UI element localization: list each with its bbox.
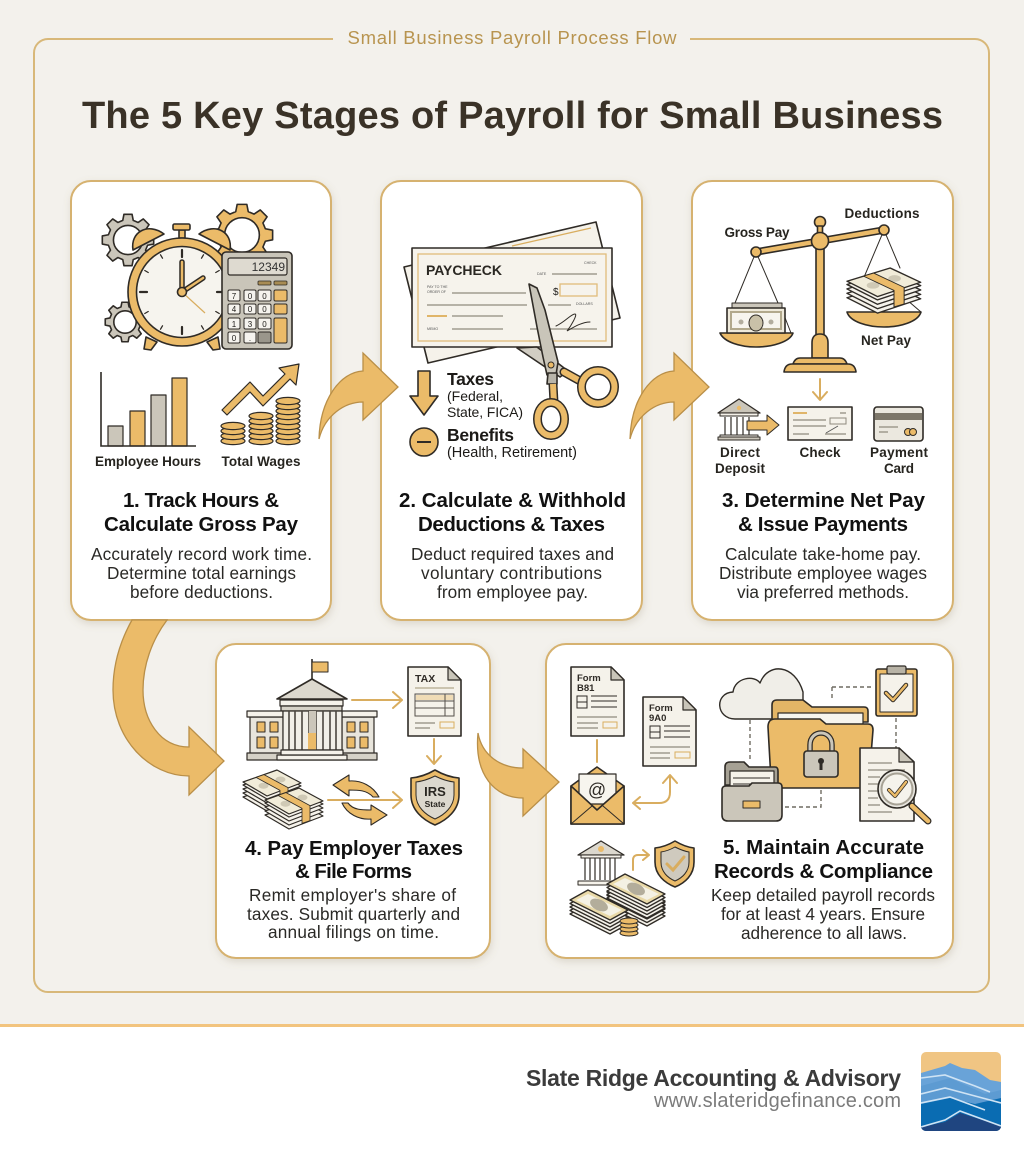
- panel: step 3: [692, 181, 953, 620]
- text: taxes: (Federal,: [447, 388, 503, 404]
- panel: step 5: [546, 644, 953, 958]
- text: step 1: [91, 544, 312, 602]
- text: step 2: from employee pay.: [437, 582, 588, 602]
- icon: small file folder: [722, 762, 782, 821]
- payment labels: Deposit: [715, 461, 766, 476]
- icon: paycheck: PAY TO THE: [427, 285, 448, 289]
- icon: clipboard: [876, 666, 917, 716]
- heading: step 3: [722, 489, 926, 536]
- connector: form to envelope: [596, 740, 598, 762]
- heading: step 3: & Issue Payments: [738, 513, 908, 536]
- icon: small bank: [578, 841, 624, 885]
- heading: step 2: [399, 489, 626, 536]
- icon: paycheck: PAYCHECK: [426, 262, 502, 278]
- chart labels: Total Wages: [222, 454, 300, 469]
- icon: minus circle: [410, 428, 438, 456]
- heading: step 1: [104, 489, 299, 536]
- heading: step 5: 5. Maintain Accurate: [723, 836, 924, 859]
- panel: step 2: [381, 181, 642, 620]
- icon: large folder with lock: [768, 700, 873, 788]
- icon: small coin stack: [620, 918, 638, 936]
- icon: form 941 document: B81: [577, 683, 595, 694]
- icon: cloud: [720, 669, 803, 719]
- text: step 1: Accurately record work time.: [91, 544, 312, 564]
- text: benefits: Benefits: [447, 425, 514, 445]
- text: step 4: annual filings on time.: [268, 922, 439, 942]
- text: step 4: taxes. Submit quarterly and: [247, 904, 460, 924]
- icon: paycheck: [404, 222, 620, 363]
- text: benefits: [447, 425, 577, 461]
- icon: payment card: [874, 407, 923, 441]
- text: taxes: Taxes: [447, 369, 494, 389]
- icon: tax form: [408, 667, 461, 736]
- text: step 4: [247, 885, 460, 942]
- icon: taxes arrow: [410, 371, 438, 415]
- heading: step 4: & File Forms: [295, 860, 412, 883]
- icon: calculator: 0: [262, 305, 267, 314]
- icon: calculator: 12349: [252, 260, 285, 274]
- text: step 5: [711, 885, 935, 943]
- icon: IRS shield: IRS: [424, 784, 446, 799]
- icon: form 940 document: Form: [649, 703, 673, 714]
- title: The 5 Key Stages of Payroll for Small Business: [82, 95, 943, 137]
- scale labels: Gross Pay: [724, 225, 790, 240]
- heading: step 1: 1. Track Hours &: [123, 489, 279, 512]
- icon: calculator: 3: [248, 320, 253, 329]
- icon: paycheck: MEMO: [427, 327, 438, 331]
- icon: email envelope: @: [588, 780, 606, 800]
- icon: calculator: 1: [232, 320, 237, 329]
- arrow: down to payments: [813, 379, 827, 400]
- icon: paycheck: DOLLARS: [576, 302, 593, 306]
- icon: cash stacks: [243, 770, 323, 829]
- heading: step 2: 2. Calculate & Withhold: [399, 489, 626, 512]
- text: step 2: Deduct required taxes and: [411, 544, 614, 564]
- icon: calculator: 0: [232, 334, 237, 343]
- heading: step 1: Calculate Gross Pay: [104, 513, 299, 536]
- icon: rising wage arrow: [222, 364, 299, 415]
- icon: alarm clock: [128, 224, 236, 350]
- icon: audit document with magnifier: [860, 748, 928, 821]
- icon: government building: [247, 659, 377, 760]
- heading: step 2: Deductions & Taxes: [418, 513, 605, 536]
- payment labels: Card: [884, 461, 914, 476]
- arrow: step 3 to step 4: [113, 620, 224, 795]
- icon: compliance shield: [655, 841, 694, 887]
- heading: step 3: 3. Determine Net Pay: [722, 489, 926, 512]
- icon: form 940 document: 9A0: [649, 713, 666, 724]
- footer band: [0, 1024, 1024, 1154]
- arrow: step 4 to step 5: [478, 733, 559, 816]
- panel: step 4: [216, 644, 490, 958]
- bar chart: employee hours: [101, 372, 196, 446]
- arrow: envelope to form: [633, 775, 677, 809]
- arrow: step 1 to step 2: [319, 353, 398, 439]
- icon: form 941 document: Form: [577, 673, 601, 684]
- icon: coin stacks: [221, 397, 300, 445]
- icon: calculator: 0: [248, 305, 253, 314]
- heading: step 5: [714, 836, 933, 883]
- icon: calculator: [222, 252, 292, 349]
- icon: calculator: .: [249, 334, 251, 343]
- icon: paycheck: CHECK: [584, 261, 597, 265]
- icon: paycheck: DATE: [537, 272, 547, 276]
- chart labels: Employee Hours: [95, 454, 201, 469]
- scale labels: Deductions: [844, 206, 920, 221]
- text: step 3: [719, 544, 927, 602]
- icon: calculator: 0: [248, 292, 253, 301]
- outer frame: [34, 39, 989, 992]
- payment labels: Check: [800, 445, 841, 460]
- logo: [921, 1052, 1001, 1131]
- text: step 5: adherence to all laws.: [741, 923, 907, 943]
- arrow: step 2 to step 3: [630, 353, 709, 439]
- icon: swap arrows: [328, 775, 402, 825]
- text: taxes: [447, 369, 523, 420]
- text: step 5: for at least 4 years. Ensure: [721, 904, 925, 924]
- icon: form 940 document: [643, 697, 696, 766]
- icon: balance scale: [720, 216, 921, 372]
- icon: money piles: [570, 874, 665, 934]
- arrow: bank to shield: [633, 850, 649, 870]
- icon: IRS shield: [411, 770, 459, 825]
- icon: paycheck: ORDER OF: [427, 290, 447, 294]
- text: taxes: State, FICA): [447, 404, 523, 420]
- icon: gears: [102, 204, 273, 342]
- chart labels: [95, 454, 300, 469]
- scale labels: [724, 206, 920, 348]
- icon: check: [788, 407, 852, 440]
- icon: calculator: 4: [232, 305, 237, 314]
- payment labels: Direct: [720, 445, 760, 460]
- text: step 1: before deductions.: [130, 582, 273, 602]
- icon: tax form: TAX: [415, 673, 435, 685]
- icon: scissors: [517, 284, 614, 436]
- text: step 2: [411, 544, 614, 602]
- footer url: www.slateridgefinance.com: [653, 1090, 901, 1112]
- text: step 3: Distribute employee wages: [719, 563, 927, 583]
- text: step 3: via preferred methods.: [737, 582, 909, 602]
- payment labels: [715, 445, 928, 476]
- text: step 4: Remit employer's share of: [249, 885, 456, 905]
- payment labels: Payment: [870, 445, 928, 460]
- text: step 1: Determine total earnings: [107, 563, 296, 583]
- icon: dashed connectors: [750, 687, 896, 807]
- icon: IRS shield: State: [425, 799, 446, 809]
- text: step 5: Keep detailed payroll records: [711, 885, 935, 905]
- icon: form 941 document: [571, 667, 624, 736]
- panel: step 1: [71, 181, 331, 620]
- heading: step 5: Records & Compliance: [714, 860, 933, 883]
- text: benefits: (Health, Retirement): [447, 445, 577, 461]
- heading: step 4: 4. Pay Employer Taxes: [245, 837, 463, 860]
- icon: calculator: 7: [232, 292, 237, 301]
- text: step 2: voluntary contributions: [421, 563, 602, 583]
- arrow: form to shield: [427, 739, 441, 764]
- footer company name: Slate Ridge Accounting & Advisory: [526, 1065, 901, 1091]
- heading: step 4: [245, 837, 463, 883]
- frame caption: Small Business Payroll Process Flow: [348, 27, 677, 48]
- icon: calculator: 0: [262, 292, 267, 301]
- icon: direct deposit bank: [718, 399, 779, 440]
- icon: email envelope: [571, 767, 624, 824]
- icon: paycheck: $: [553, 287, 559, 298]
- text: step 3: Calculate take-home pay.: [725, 544, 921, 564]
- icon: calculator: 0: [262, 320, 267, 329]
- arrow: building to tax form: [352, 692, 402, 708]
- scale labels: Net Pay: [861, 333, 911, 348]
